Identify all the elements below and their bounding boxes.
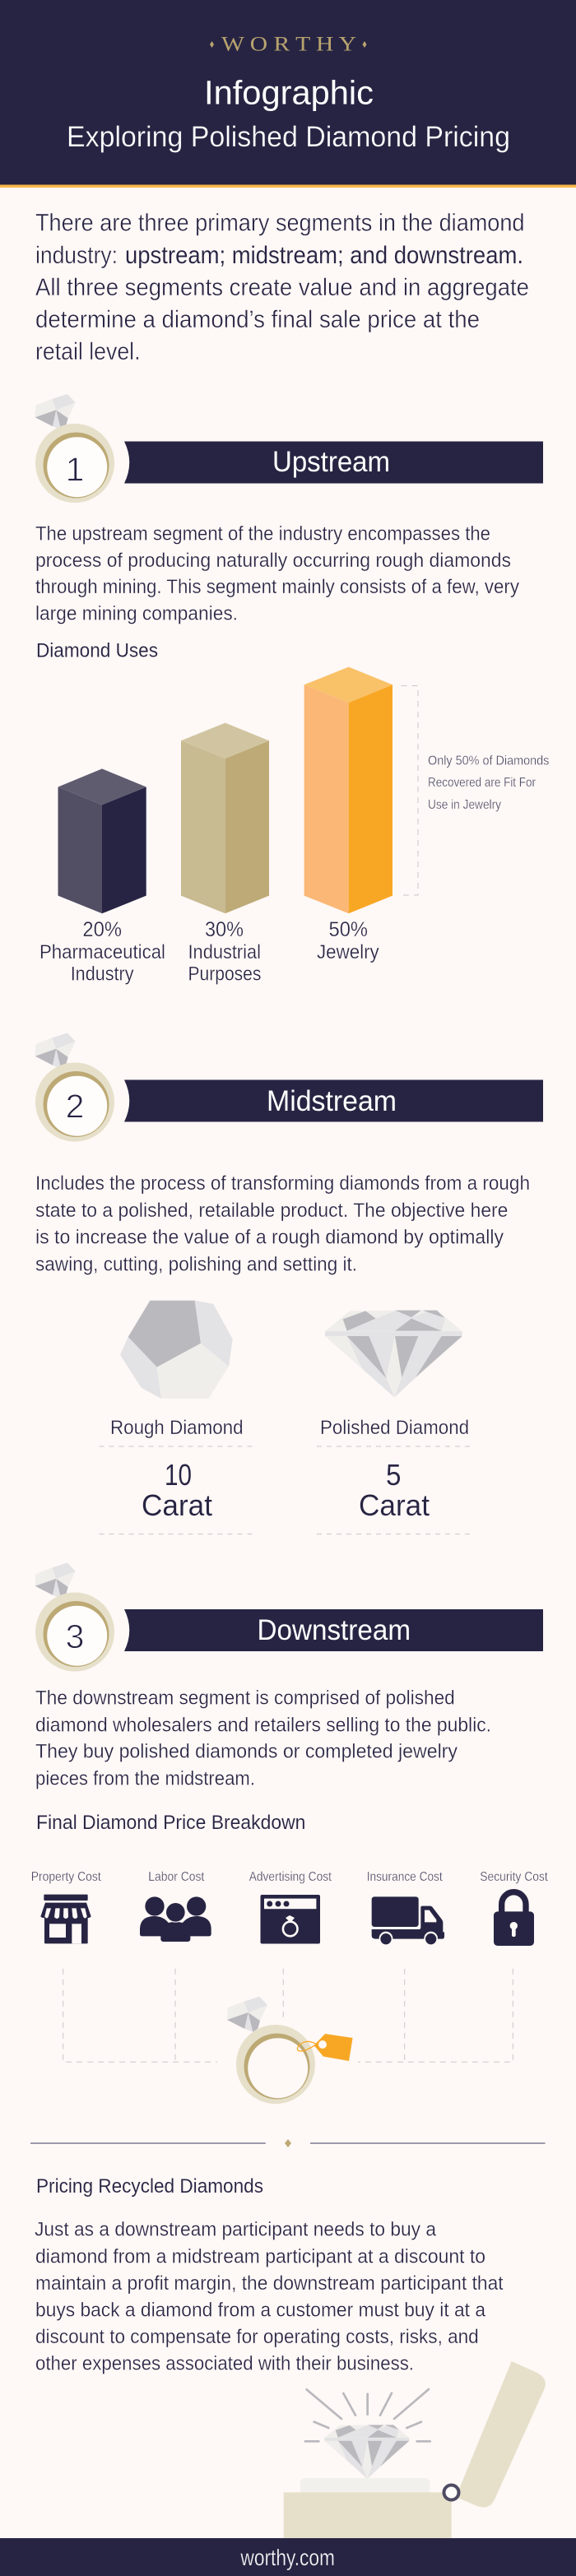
downstream paragraph: diamond wholesalers and retailers selling to the public. [35, 1714, 491, 1736]
icon: ring 3: 3 [66, 1618, 84, 1655]
bracket note: Use in Jewelry [428, 798, 501, 812]
cost: labor: Labor Cost [148, 1870, 205, 1884]
heading: Final Diamond Price Breakdown: Final Diamond Price Breakdown [36, 1812, 305, 1834]
bracket note: Only 50% of Diamonds [428, 754, 549, 768]
recycled diamonds paragraph: discount to compensate for operating costs, risks, and [35, 2326, 479, 2348]
downstream paragraph: The downstream segment is comprised of polished [35, 1687, 455, 1710]
section banner: Downstream: Downstream [257, 1614, 411, 1646]
comparison: rough diamond [99, 1417, 254, 1534]
midstream paragraph: Includes the process of transforming diamonds from a rough [35, 1172, 530, 1195]
icon: ring 1: 1 [66, 451, 84, 489]
downstream paragraph: They buy polished diamonds or completed jewelry [35, 1741, 458, 1763]
icon: ring 2: 2 [66, 1088, 84, 1126]
midstream paragraph: sawing, cutting, polishing and setting it. [35, 1253, 357, 1275]
recycled diamonds paragraph: Just as a downstream participant needs to buy a [35, 2219, 436, 2241]
recycled diamonds paragraph: other expenses associated with their business. [35, 2353, 414, 2374]
divider [30, 2139, 545, 2147]
cost: insurance: Insurance Cost [367, 1870, 443, 1884]
bar: jewelry 50%: Jewelry [317, 941, 379, 963]
bar: industrial 30%: Purposes [188, 963, 261, 985]
intro text: upstream; midstream; and downstream. [125, 242, 523, 269]
midstream paragraph: state to a polished, retailable product. The objective here [35, 1200, 508, 1222]
icon: rough diamond [120, 1301, 233, 1399]
bracket note: Recovered are Fit For [428, 776, 537, 790]
upstream paragraph: through mining. This segment mainly consists of a few, very [35, 576, 520, 598]
cost: security: Security Cost [480, 1870, 548, 1884]
title: Infographic [204, 74, 374, 112]
midstream paragraph: is to increase the value of a rough diamond by optimally [35, 1226, 504, 1249]
icon: browser with ring [260, 1895, 320, 1943]
heading: Pricing Recycled Diamonds: Pricing Recycled Diamonds [36, 2175, 263, 2198]
footer: worthy.com [240, 2545, 335, 2570]
bar: pharmaceutical 20%: Industry [71, 963, 133, 985]
midstream paragraph [35, 1172, 530, 1275]
bar: pharmaceutical 20%: 20% [82, 918, 122, 941]
diamond [324, 2425, 409, 2479]
footer [0, 2538, 576, 2576]
icon: ring 2 [35, 1033, 114, 1142]
icon: store [40, 1895, 91, 1943]
icon: ring 3 [35, 1563, 114, 1672]
recycled diamonds paragraph [35, 2219, 504, 2374]
bar: pharmaceutical 20%: Pharmaceutical [39, 941, 165, 963]
section banner: Midstream [124, 1079, 543, 1122]
bar: pharmaceutical 20% [39, 768, 165, 985]
illustration: ring box with diamond [284, 2361, 546, 2539]
cost: property [31, 1870, 101, 1943]
section banner: Upstream [124, 441, 543, 484]
icon: ring with price tag [227, 1997, 353, 2104]
bracket note [428, 754, 549, 812]
section banner: Upstream: Upstream [272, 446, 390, 478]
cost: advertising [249, 1870, 332, 1943]
downstream paragraph [35, 1687, 491, 1790]
cushion [300, 2478, 430, 2496]
header banner [0, 0, 576, 188]
intro text [35, 210, 529, 365]
cost: advertising: Advertising Cost [249, 1870, 332, 1884]
upstream paragraph: process of producing naturally occurring rough diamonds [35, 550, 511, 572]
icon: padlock [494, 1892, 534, 1946]
recycled diamonds paragraph: diamond from a midstream participant at a discount to [35, 2245, 485, 2267]
comparison: rough diamond: Rough Diamond [110, 1417, 244, 1439]
intro text: There are three primary segments in the diamond [35, 210, 525, 237]
comparison: polished diamond [317, 1417, 471, 1534]
upstream paragraph: The upstream segment of the industry encompasses the [35, 522, 490, 545]
box base [284, 2492, 452, 2539]
dashed connectors [63, 1969, 513, 2062]
comparison: rough diamond: 10 [165, 1458, 192, 1492]
subtitle: Exploring Polished Diamond Pricing [67, 121, 510, 153]
icon: truck [372, 1896, 444, 1945]
downstream paragraph: pieces from the midstream. [35, 1768, 255, 1790]
cost: security [480, 1870, 548, 1946]
box lid [456, 2361, 546, 2508]
bar: industrial 30% [181, 723, 269, 985]
sparkle rays [305, 2389, 430, 2441]
comparison: rough diamond: Carat [142, 1488, 212, 1522]
logo: WORTHY: W O R T H Y [221, 33, 356, 55]
section banner: Midstream: Midstream [267, 1085, 397, 1117]
cost: property: Property Cost [31, 1870, 101, 1884]
hinge [444, 2485, 459, 2499]
icon: polished diamond [325, 1311, 462, 1397]
bracket [402, 686, 418, 895]
recycled diamonds paragraph: buys back a diamond from a customer must buy it at a [35, 2299, 485, 2321]
cost: labor [140, 1870, 211, 1942]
bar chart: diamond uses [39, 667, 549, 985]
section banner: Downstream [124, 1609, 543, 1651]
bar: jewelry 50% [304, 667, 393, 963]
intro text: determine a diamond’s final sale price at the [35, 306, 480, 333]
upstream paragraph [35, 522, 520, 625]
icon: people [140, 1896, 211, 1942]
heading: Diamond Uses: Diamond Uses [36, 640, 158, 662]
icon: ring 1 [35, 394, 114, 503]
comparison: polished diamond: Polished Diamond [320, 1417, 469, 1439]
upstream paragraph: large mining companies. [35, 603, 238, 625]
bar: industrial 30%: Industrial [188, 941, 261, 963]
bar: industrial 30%: 30% [205, 918, 244, 941]
cost: insurance [367, 1870, 444, 1945]
intro text: All three segments create value and in aggregate [35, 274, 529, 301]
bar: jewelry 50%: 50% [329, 918, 368, 941]
recycled diamonds paragraph: maintain a profit margin, the downstream participant that [35, 2272, 504, 2295]
intro text: retail level. [35, 338, 140, 365]
comparison: polished diamond: Carat [359, 1488, 430, 1522]
intro text: industry: [35, 242, 118, 269]
comparison: polished diamond: 5 [386, 1458, 402, 1492]
icon: price tag [297, 2034, 353, 2061]
